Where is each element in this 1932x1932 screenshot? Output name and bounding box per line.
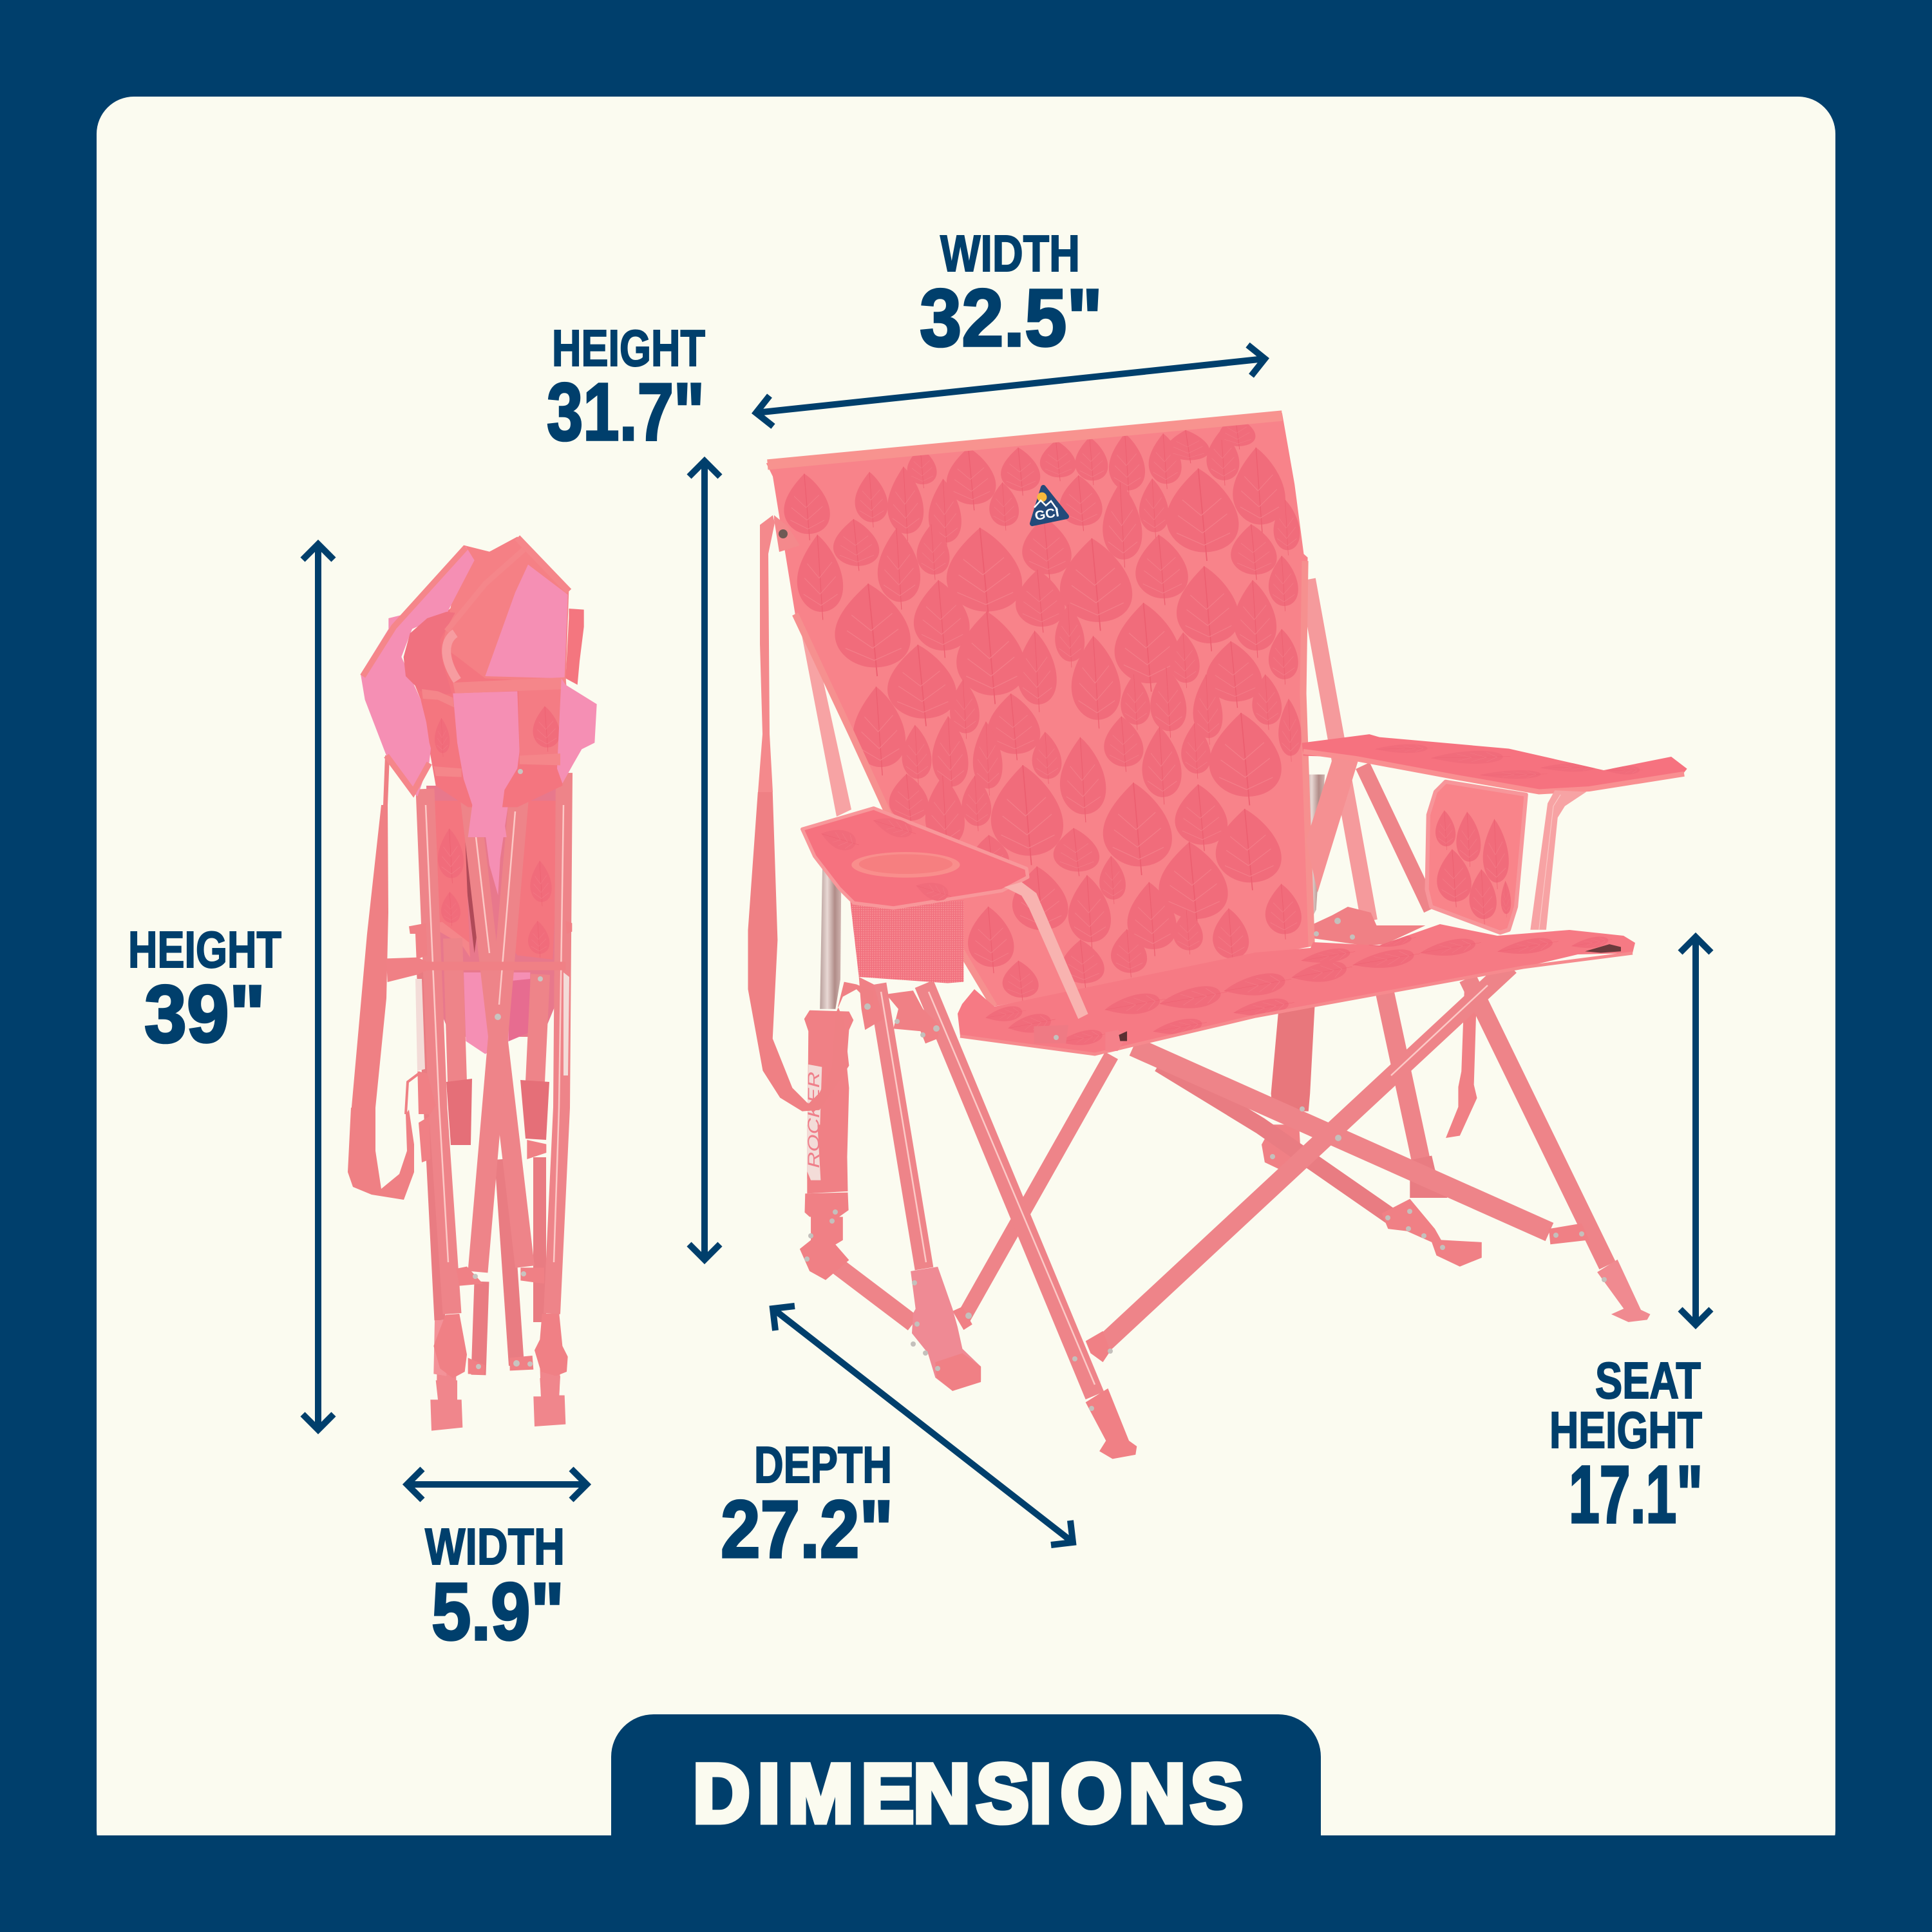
label: depth [721, 1436, 893, 1575]
folded chair top fabric [361, 536, 597, 837]
left armrest leaves [819, 811, 954, 905]
strap snap patch [774, 515, 800, 552]
rocker label text: ROCKER [805, 1072, 823, 1168]
seat front roll and left arm [802, 808, 1127, 1051]
arrow: folded width [407, 1469, 587, 1500]
right arm pale tube highlight [1539, 795, 1560, 930]
label: main height [547, 319, 705, 457]
right long leg [1468, 978, 1607, 1265]
depth value: 27.2" [721, 1484, 893, 1575]
back fabric base [766, 413, 1312, 1007]
seat fabric [958, 924, 1635, 1054]
folded lower pink fabric [464, 972, 530, 1054]
label: folded width [425, 1518, 565, 1657]
logo text: GCI [1034, 506, 1060, 524]
arrow: folded height [303, 544, 334, 1430]
right armrest binding [1303, 752, 1684, 791]
strap snap [779, 529, 788, 538]
rear hinge clip [1382, 1199, 1482, 1267]
folded rear tubes [422, 966, 540, 1375]
folded outer tubes [425, 773, 564, 1314]
inner front leg highlight [881, 992, 926, 1262]
arrow: seat height [1680, 937, 1711, 1325]
back fabric [766, 413, 1312, 1007]
seat base [958, 924, 1635, 1054]
main height value: 31.7" [547, 366, 705, 457]
chrome tube and rocker cylinder [804, 866, 853, 1179]
shoulder strap upper [758, 515, 775, 792]
front right foot [1086, 1388, 1137, 1459]
folded middle fabric [433, 800, 559, 960]
thin x tube bracket [952, 1307, 972, 1330]
right armrest base [1302, 734, 1687, 793]
folded width value: 5.9" [431, 1566, 564, 1657]
folded hinge sockets [446, 1079, 549, 1145]
folded rocker strips [415, 972, 569, 1075]
main chair screws [804, 918, 1607, 1411]
front bracket [886, 990, 940, 1043]
long cross tube [1133, 1046, 1549, 1232]
seat roll end [1105, 1030, 1127, 1051]
main chair [748, 413, 1687, 1459]
inner front leg [877, 984, 924, 1269]
folded bundle backing [426, 786, 567, 1037]
folded v tubes [467, 773, 525, 1272]
logo shield [1032, 488, 1066, 524]
seat leaf pattern [985, 933, 1613, 1048]
back fabric side binding [795, 561, 1312, 1007]
back fabric leaf pattern [784, 416, 1302, 1001]
seat height value: 17.1" [1569, 1449, 1703, 1540]
folded height value: 39" [144, 969, 265, 1059]
folded horizontal strap [386, 921, 572, 1114]
rear upper tube [1307, 580, 1369, 921]
shoulder strap lower [748, 792, 874, 1112]
seat tube section [1034, 1025, 1068, 1043]
main width title: WIDTH [940, 225, 1080, 282]
folded feet [430, 1314, 568, 1431]
rear hinge behind cross tubes [1262, 1124, 1301, 1169]
right chrome [1305, 775, 1325, 921]
bottom frame band [0, 1835, 1932, 1932]
cup holder inner [859, 854, 952, 874]
rear dangling strap [1446, 985, 1477, 1138]
cup holder [851, 852, 960, 878]
folded chair [348, 536, 597, 1431]
rail tube [831, 1261, 913, 1323]
right strut [1363, 766, 1431, 909]
title: dimensions: DIMENSIONS [693, 1748, 1243, 1840]
rear leg socket [1410, 1156, 1447, 1198]
rocker lower cylinder [805, 1125, 849, 1217]
depth title: DEPTH [754, 1436, 892, 1493]
gci logo [1032, 488, 1066, 524]
left arm mesh pocket and seat roll [850, 900, 963, 1030]
arrow: main height [689, 461, 720, 1260]
lower cross tube [1159, 1064, 1391, 1217]
back fabric top binding [768, 416, 1282, 464]
right arm pieces [1302, 734, 1687, 952]
inner seat bracket [1313, 907, 1425, 945]
right arm support strap [1306, 756, 1358, 893]
right armrest leaves [1375, 744, 1643, 779]
main x tube highlight [929, 992, 1095, 1385]
arrow: main width [756, 345, 1265, 426]
label: folded height [128, 921, 281, 1059]
seat height title line 1: SEAT [1595, 1352, 1701, 1409]
rear leg lower [1383, 985, 1421, 1159]
folded plates and braces [419, 1116, 546, 1375]
left armrest base [802, 808, 1028, 908]
right x tube highlight [1391, 985, 1488, 1075]
right x tube [1098, 966, 1510, 1349]
seat front edge binding [960, 953, 1633, 1054]
rocker hinge [800, 1217, 849, 1280]
dark gap in seat roll [1119, 1031, 1127, 1041]
logo mountain [1034, 500, 1057, 510]
main width value: 32.5" [920, 272, 1103, 363]
cross tube bracket [1549, 1224, 1589, 1244]
pocket base [1427, 782, 1526, 933]
folded width title: WIDTH [425, 1518, 565, 1575]
right arm pale tube [1530, 790, 1586, 930]
label: main width [920, 225, 1103, 363]
rear cylinder [1271, 989, 1316, 1112]
main x tube [924, 984, 1095, 1396]
left back tube [799, 618, 851, 817]
thin x tube [962, 1056, 1112, 1320]
left arm pale tube [1004, 882, 1088, 1019]
folded height title: HEIGHT [128, 921, 281, 978]
label: seat height [1549, 1352, 1703, 1540]
folded inner tubes [453, 938, 540, 1082]
arrow: depth [773, 1306, 1073, 1545]
front socket and foot [911, 1267, 1110, 1391]
pocket leaves [1435, 810, 1511, 924]
folded shoulder strap [348, 755, 421, 1200]
folded chair screws [473, 769, 543, 1369]
folded lower pink shadow [509, 979, 530, 1041]
logo sun [1037, 492, 1047, 502]
bottom title tab [611, 1714, 1321, 1835]
right foot [1597, 1260, 1651, 1322]
main height title: HEIGHT [552, 319, 705, 377]
seat end dark gap [1585, 944, 1621, 952]
seat height title line 2: HEIGHT [1549, 1401, 1702, 1459]
